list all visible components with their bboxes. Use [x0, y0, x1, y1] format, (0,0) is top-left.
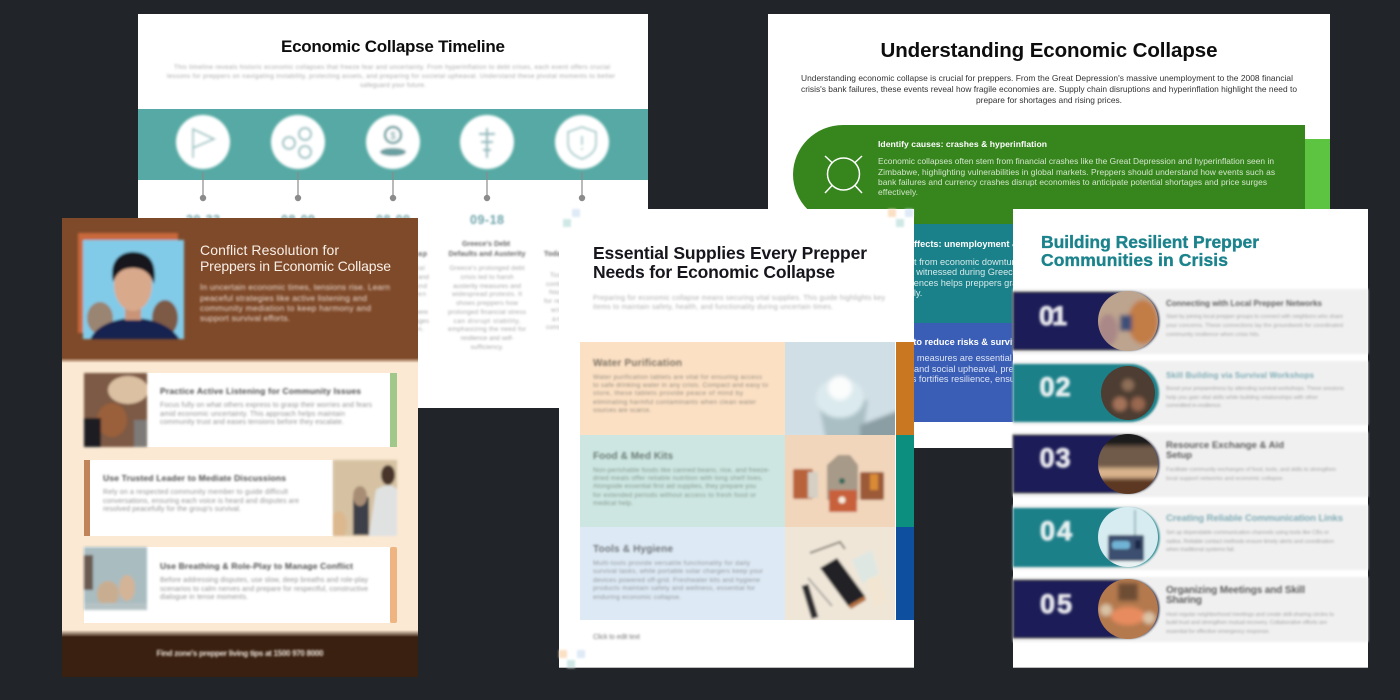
- row 05: Host regular neighborhood meetings and create skill-sharing circles to: [1166, 612, 1334, 618]
- photo: listening: [84, 373, 148, 447]
- item: active listening: [84, 373, 397, 447]
- blue band: reduce risks: [793, 323, 1305, 422]
- row: tools and hygiene: devices powered off-grid. Freshwater kits and hygiene: [593, 577, 760, 584]
- photo: role play: [84, 547, 147, 610]
- row 02: help you gain vital skills while building relationships with other: [1166, 395, 1318, 401]
- timeline column: fifth: Today's Inflation Risk: [544, 249, 620, 258]
- timeline column: fifth: with stored goods: [550, 307, 614, 314]
- row: water purification: sources are scarce.: [593, 407, 651, 414]
- row 03: Resource Exchange & Aid: [1166, 440, 1284, 451]
- conflict title: Conflict Resolution for: [200, 242, 339, 258]
- photo: water tablets: [785, 342, 895, 435]
- row 01: Connecting with Local Prepper Networks: [1166, 299, 1323, 308]
- row: food and med kits: Non-perishable foods like canned beans, rice, and freeze-: [593, 467, 770, 474]
- icon: linked circles: [271, 115, 325, 169]
- timeline column: fifth: and clear plans: [552, 316, 613, 323]
- teal band: effects: consequences helps preppers grasp how society responds: [879, 278, 1118, 288]
- timeline intro text: This timeline reveals historic economic collapses that freeze fear and uncertainty. From hyperinflation to debt crises, each event offers crucial: [174, 64, 610, 71]
- green band: identify causes: Economic collapses often stem from financial crashes like the Great Depression and hyperinflation seen in: [878, 156, 1274, 166]
- row: tools and hygiene: [580, 524, 914, 624]
- blue band: reduce risks: Proactive measures are essential to weather economic shocks: [876, 353, 1131, 363]
- footer bar: Find zone's prepper living tips at 1500 970 8000: [156, 649, 324, 658]
- icon: circle with four corner strokes: [825, 156, 862, 193]
- panel: essential supplies: [559, 209, 914, 668]
- conflict intro text: support survival efforts.: [200, 313, 290, 323]
- communities title: [1041, 232, 1259, 270]
- timeline column: third: and rising inflation.: [360, 326, 424, 333]
- blue band: reduce risks: and social upheaval, preppers need stored goods: [914, 364, 1116, 374]
- timeline dates: 09-18: [470, 213, 504, 227]
- row 05: [1013, 575, 1368, 643]
- conflict intro text: peaceful strategies like active listening and: [200, 293, 367, 303]
- item: active listening: Focus fully on what others express to grasp their worries and fears: [160, 402, 372, 409]
- timeline column: Greece's debt: crisis led to harsh: [460, 274, 514, 281]
- row 03: 03: [1040, 443, 1070, 473]
- timeline intro text: [167, 64, 615, 89]
- supplies title: Essential Supplies Every Prepper: [593, 243, 867, 263]
- timeline dates: 08-09: [281, 213, 315, 227]
- conflict title: [200, 242, 391, 274]
- row: tools and hygiene: survival tasks, while portable solar chargers keep your: [593, 568, 764, 575]
- conflict intro text: community mediation to keep harmony and: [200, 303, 371, 313]
- timeline dates: [186, 213, 599, 227]
- timeline column: fifth: Today's rising costs: [550, 272, 615, 279]
- item: trusted leader: resolved peacefully for the group's survival.: [103, 506, 241, 513]
- understanding intro text: prepare for shortages and rising prices.: [976, 95, 1122, 105]
- conflict intro text: In uncertain economic times, tensions rise. Learn: [200, 282, 390, 292]
- row 04: when traditional systems fail.: [1165, 547, 1235, 553]
- supplies intro text: items to maintain safety, health, and functionality during uncertain times.: [593, 304, 833, 311]
- panel: economic collapse timeline: [138, 14, 648, 408]
- item: trusted leader: Rely on a respected community member to guide difficult: [103, 489, 288, 496]
- photo: meeting: [1098, 579, 1158, 639]
- panel: resilient prepper communities: [1013, 209, 1368, 668]
- brown header: [62, 218, 418, 358]
- row: water purification: eliminating harmful contaminants when clean water: [593, 399, 757, 406]
- row 04: [1013, 503, 1368, 571]
- timeline column: third: [355, 249, 430, 333]
- photo: exchange: [1098, 434, 1158, 494]
- timeline column: third: the world to sudden: [358, 291, 426, 298]
- photo: mediation: [331, 460, 397, 539]
- timeline column: third: credit markets around: [357, 283, 427, 290]
- green band: identify causes: Identify causes: crashes & hyperinflation: [878, 139, 1047, 149]
- item: trusted leader: Use Trusted Leader to Mediate Discussions: [103, 473, 286, 483]
- green band: identify causes: [793, 125, 1305, 224]
- row: tools and hygiene: enduring economic collapse.: [593, 594, 681, 601]
- icon: flag: [176, 115, 230, 169]
- row 05: Organizing Meetings and Skill: [1166, 585, 1305, 596]
- timeline dates: 20-23: [565, 213, 599, 227]
- edit text note: Click to edit text: [593, 634, 640, 641]
- row 03: Facilitate community exchanges of food, tools, and skills to strengthen: [1166, 467, 1336, 473]
- row: tools and hygiene: products maintain safety and wellness, essential for: [593, 585, 756, 592]
- row 01: your concerns. These connections lay the groundwork for coordinated: [1166, 323, 1343, 329]
- timeline column: Greece's debt: shows preppers how: [456, 300, 518, 307]
- timeline column: Greece's debt: emphasizing the need for: [448, 326, 527, 333]
- timeline intro text: safeguard your future.: [360, 82, 426, 89]
- item: active listening: amid economic uncertainty. This approach helps maintain: [160, 411, 345, 418]
- row 02: 02: [1040, 372, 1070, 402]
- row 05: build trust and strengthen mutual recovery. Collaborative efforts are: [1166, 620, 1327, 626]
- row: water purification: to safe drinking water in any crisis. Compact and easy to: [593, 382, 768, 389]
- row: food and med kits: medical help.: [593, 500, 633, 507]
- communities title: Building Resilient Prepper: [1041, 232, 1259, 252]
- timeline connectors: [200, 172, 585, 201]
- row: food and med kits: Alongside essential first aid supplies, they prepare you: [593, 483, 756, 490]
- timeline column: Greece's debt: sufficiency.: [470, 344, 504, 351]
- teal timeline band: [138, 109, 648, 180]
- understanding intro text: Understanding economic collapse is crucial for preppers. From the Great Depression's massive unemployment to the 2008 financial: [801, 73, 1293, 83]
- supplies intro text: [593, 295, 886, 311]
- accent strip: [1290, 139, 1330, 239]
- photo: group 01: [1098, 291, 1158, 351]
- green band: identify causes: effectively.: [878, 187, 918, 197]
- teal band: effects: Fallout from economic downturns can spread quickly: [889, 257, 1103, 267]
- row: food and med kits: for extended periods without access to fresh food or: [593, 492, 757, 499]
- row 03: Setup: [1166, 450, 1192, 461]
- row 04: 04: [1040, 516, 1072, 546]
- row: water purification: Water purification tablets are vital for ensuring access: [593, 374, 763, 381]
- row: food and med kits: dried meals offer reliable nutrition with long shelf lives.: [593, 475, 763, 482]
- photo: workshop: [1101, 366, 1155, 420]
- item: breathing and role-play: Use Breathing & Role-Play to Manage Conflict: [160, 561, 353, 571]
- timeline column: third: preppers who saved were: [356, 309, 428, 316]
- timeline column: fifth: [544, 249, 621, 331]
- row 05: essential for effective emergency response.: [1166, 629, 1270, 635]
- row: food and med kits: Food & Med Kits: [593, 451, 673, 462]
- row 01: [1013, 287, 1368, 355]
- row 04: Set up dependable communication channels using tools like CBs or: [1166, 530, 1329, 536]
- teal band: effects: accordingly.: [874, 288, 922, 298]
- row 05: 05: [1040, 589, 1072, 619]
- item: active listening: Practice Active Listening for Community Issues: [160, 386, 361, 396]
- timeline column: Greece's debt: resilience and self-: [460, 335, 514, 342]
- item: breathing and role-play: [84, 547, 397, 623]
- timeline column: Greece's debt: can disrupt stability,: [454, 318, 521, 325]
- row 02: committed in-resilience.: [1166, 403, 1222, 409]
- row 05: Sharing: [1166, 595, 1202, 606]
- timeline dates: 29-33: [186, 213, 220, 227]
- row: tools and hygiene: Multi-tools provide versatile functionality for daily: [593, 560, 751, 567]
- row 03: [1013, 430, 1368, 498]
- timeline column: Greece's debt: Greece's prolonged debt: [450, 265, 525, 272]
- item: breathing and role-play: scenarios to calm nerves and prepare for respectful, constructive: [160, 586, 368, 593]
- timeline column: fifth: constantly and carefully.: [546, 324, 618, 331]
- blue band: reduce risks: Take steps to reduce risks & survive economic shocks: [864, 337, 1102, 347]
- row 01: 01: [1039, 301, 1067, 331]
- photo: tools and phone: [785, 527, 895, 620]
- timeline column: Greece's debt: [448, 239, 527, 351]
- icon: coin and hands: $: [390, 131, 396, 142]
- item: breathing and role-play: dialogue in tense moments.: [160, 594, 248, 601]
- understanding title: Understanding Economic Collapse: [880, 39, 1218, 62]
- item: trusted leader: [84, 460, 397, 539]
- row 03: local support networks and economic collapse.: [1166, 476, 1284, 482]
- row 04: radios. Reliable contact methods ensure timely alerts and coordination: [1166, 539, 1334, 545]
- icon: caduceus: [460, 115, 514, 169]
- supplies intro text: Preparing for economic collapse means securing vital supplies. This guide highlights key: [593, 295, 886, 302]
- item: trusted leader: conversations, ensuring each voice is heard and disputes are: [103, 498, 299, 505]
- row 01: community resilience when crisis hits.: [1166, 332, 1260, 338]
- decorative squares: [559, 209, 913, 668]
- teal band: effects: as witnessed during Greece's debt crisis and beyond: [904, 267, 1119, 277]
- timeline column: Greece's debt: austerity measures and: [453, 283, 521, 290]
- timeline column: Greece's debt: widespread protests. It: [451, 291, 522, 298]
- green band: identify causes: bank failures and currency crashes disrupt economies to anticipate potential shortages and price surges: [878, 177, 1267, 187]
- panel: conflict resolution: [62, 218, 418, 677]
- row 02: Boost your preparedness by attending survival workshops. These sessions: [1166, 386, 1344, 392]
- photo: food and kits: [785, 435, 895, 527]
- teal band: effects: Analyze effects: unemployment & unrest: [872, 239, 1049, 249]
- communities title: Communities in Crisis: [1041, 250, 1228, 270]
- timeline column: fifth: for resilient communities: [544, 298, 621, 305]
- timeline title: Economic Collapse Timeline: [281, 37, 505, 56]
- item: active listening: community trust and eases tensions before they escalate.: [160, 419, 344, 426]
- row 01: Start by joining local prepper groups to connect with neighbors who share: [1166, 314, 1343, 320]
- supplies title: Needs for Economic Collapse: [593, 262, 835, 282]
- timeline column: Greece's debt: Greece's Debt: [462, 239, 511, 248]
- timeline column: third: crisis exposed banks and: [355, 274, 429, 281]
- row 02: Skill Building via Survival Workshops: [1166, 371, 1315, 380]
- timeline column: third: Global Credit Gap: [357, 249, 428, 258]
- supplies title: [593, 243, 867, 282]
- timeline column: Greece's debt: Defaults and Austerity: [448, 249, 526, 258]
- row: water purification: store, these tablets provide peace of mind by: [593, 390, 744, 397]
- conflict intro text: [200, 282, 390, 323]
- portrait photo: [78, 233, 184, 340]
- row: food and med kits: [580, 432, 914, 530]
- timeline column: third: able to weather shortages: [355, 318, 430, 325]
- blue band: reduce risks: This fortifies resilience, ensuring survival and stability: [899, 374, 1115, 384]
- understanding intro text: [801, 73, 1297, 105]
- icon: coin and hands: [366, 115, 420, 169]
- item: breathing and role-play: Before addressing disputes, use slow, deep breaths and role-play: [160, 577, 368, 584]
- timeline column: fifth: continue to test savings: [546, 281, 619, 288]
- footer bar: [62, 630, 418, 677]
- teal band: effects: [793, 224, 1305, 323]
- icon: shield: [555, 115, 609, 169]
- row 02: [1013, 361, 1368, 425]
- row: tools and hygiene: Tools & Hygiene: [593, 544, 673, 555]
- photo: radio: [1098, 507, 1158, 567]
- timeline column: third: The global financial: [359, 265, 426, 272]
- conflict title: Preppers in Economic Collapse: [200, 258, 391, 274]
- row 04: Creating Reliable Communication Links: [1166, 513, 1343, 524]
- green band: identify causes: Zimbabwe, highlighting vulnerabilities in global markets. Preppers should understand how events such as: [878, 167, 1275, 177]
- timeline column: Greece's debt: prolonged financial stress: [448, 309, 527, 316]
- timeline intro text: lessons for preppers on navigating instability, protecting assets, and preparing for societal upheaval. Understand these pivotal moments to better: [167, 73, 615, 80]
- row: water purification: Water Purification: [593, 358, 682, 369]
- timeline dates: 08-09: [376, 213, 410, 227]
- row: water purification: [580, 338, 914, 440]
- understanding intro text: crisis's bank failures, these events reveal how fragile economies are. Supply chain disruptions and hyperinflation highlight the need to: [801, 84, 1297, 94]
- panel: understanding economic collapse: [768, 14, 1330, 448]
- timeline column: fifth: households everywhere: [549, 289, 615, 296]
